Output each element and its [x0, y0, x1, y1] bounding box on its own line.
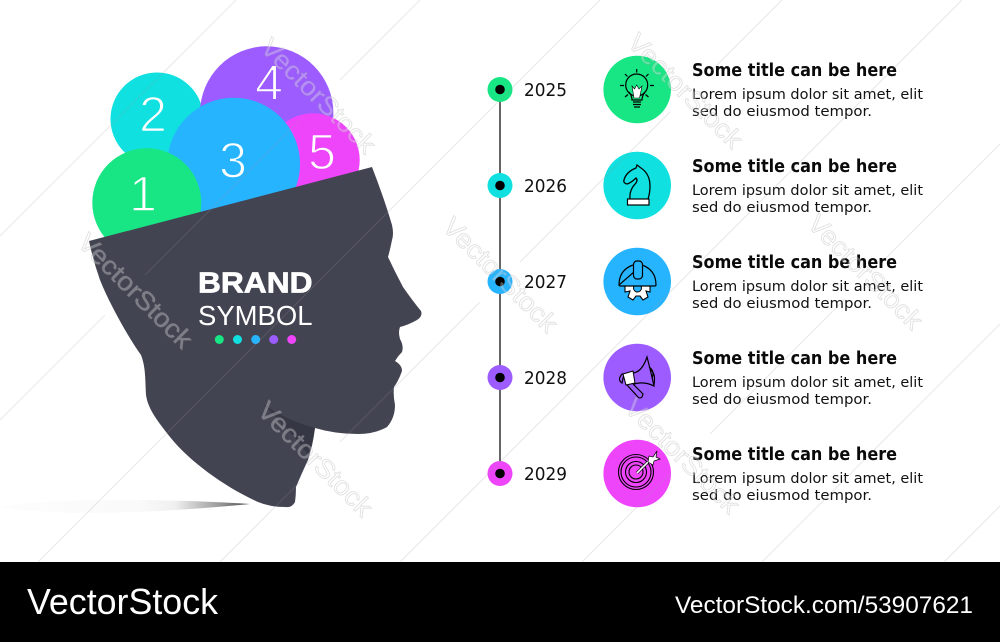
text block 2: Some title can be here — [692, 156, 897, 177]
text block 2: Lorem ipsum dolor sit amet, elit — [692, 183, 923, 199]
watermarks: VectorStock — [802, 208, 930, 336]
watermarks: VectorStock — [619, 392, 747, 520]
timeline node 2025 — [488, 77, 567, 102]
footer bar — [0, 562, 1000, 642]
icon: light bulb — [603, 56, 671, 123]
circle 5: 5 — [308, 124, 336, 180]
watermarks: VectorStock — [437, 211, 565, 339]
numbered circles — [92, 46, 360, 257]
text block 4: Lorem ipsum dolor sit amet, elit — [692, 375, 923, 391]
timeline node 2028: 2028 — [524, 368, 567, 389]
icon: target with dart — [603, 440, 671, 507]
watermarks: VectorStock — [622, 27, 750, 155]
text block 5: sed do eiusmod tempor. — [692, 488, 872, 504]
circle 4: 4 — [255, 55, 283, 111]
footer image id: VectorStock.com/53907621 — [675, 592, 973, 619]
watermarks: VectorStock — [252, 395, 380, 523]
circle 3: 3 — [219, 132, 247, 188]
icon: helmet with gear — [603, 248, 671, 315]
brand colour dots — [215, 335, 296, 344]
text block 1: Lorem ipsum dolor sit amet, elit — [692, 87, 923, 103]
text block 4: Some title can be here — [692, 348, 897, 369]
text block 1 — [692, 60, 923, 120]
brand symbol — [198, 268, 312, 344]
timeline node 2028 — [488, 365, 567, 390]
text block 2: sed do eiusmod tempor. — [692, 200, 872, 216]
timeline node 2027: 2027 — [524, 272, 567, 293]
text block 4 — [692, 348, 923, 408]
circle 4 — [200, 46, 333, 180]
timeline — [488, 77, 567, 486]
brand subtitle: SYMBOL — [198, 300, 312, 331]
icon: chess knight — [603, 152, 671, 219]
watermarks — [72, 27, 930, 523]
circle 1: 1 — [129, 166, 157, 222]
timeline node 2025: 2025 — [524, 80, 567, 101]
text block 5: Lorem ipsum dolor sit amet, elit — [692, 471, 923, 487]
text block 1: Some title can be here — [692, 60, 897, 81]
head silhouette — [89, 167, 422, 507]
timeline node 2026 — [488, 173, 567, 198]
text block 5 — [692, 444, 923, 504]
ground shadow — [0, 500, 250, 513]
timeline node 2027 — [488, 269, 567, 294]
circle 1 — [92, 148, 201, 257]
text block 3: Some title can be here — [692, 252, 897, 273]
text block 2 — [692, 156, 923, 216]
icon: megaphone — [603, 344, 671, 411]
watermarks: VectorStock — [255, 32, 383, 160]
timeline node 2029: 2029 — [524, 464, 567, 485]
timeline node 2026: 2026 — [524, 176, 567, 197]
text block 3: Lorem ipsum dolor sit amet, elit — [692, 279, 923, 295]
text block 4: sed do eiusmod tempor. — [692, 392, 872, 408]
text block 5: Some title can be here — [692, 444, 897, 465]
timeline node 2029 — [488, 461, 567, 486]
footer logo: VectorStock — [27, 581, 219, 622]
circle 2: 2 — [139, 86, 167, 142]
circle 3 — [167, 98, 300, 230]
text block 1: sed do eiusmod tempor. — [692, 104, 872, 120]
brand title: BRAND — [198, 268, 312, 300]
text block 3: sed do eiusmod tempor. — [692, 296, 872, 312]
circle 2 — [110, 72, 204, 166]
circle 5 — [266, 113, 360, 207]
text block 3 — [692, 252, 923, 312]
watermarks: VectorStock — [72, 227, 200, 355]
